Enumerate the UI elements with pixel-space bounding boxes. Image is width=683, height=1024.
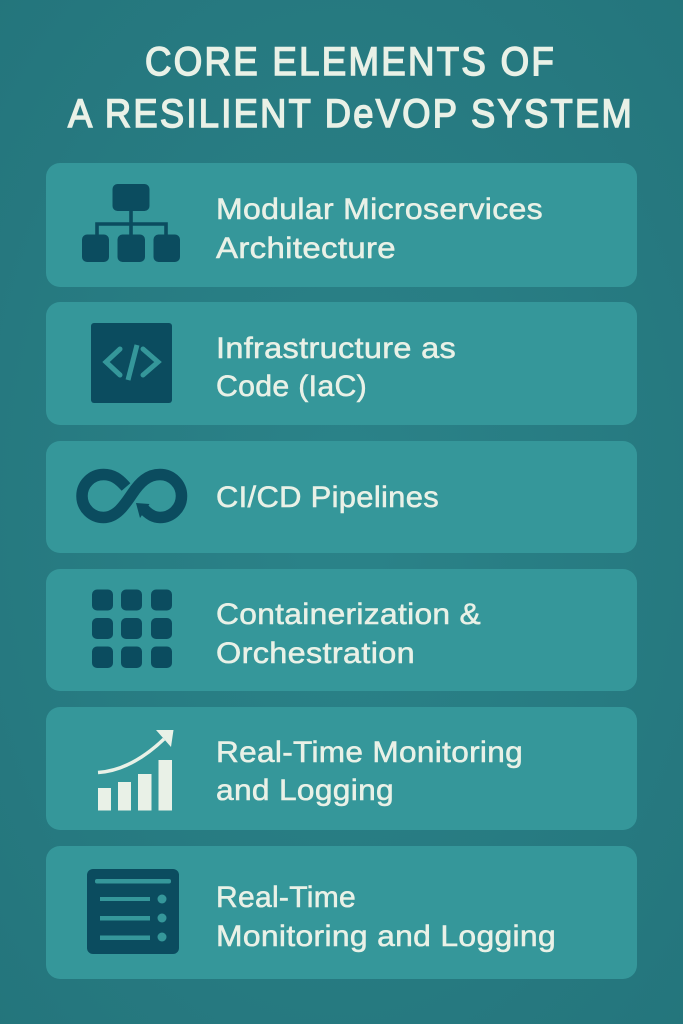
label: real-time monitoring and logging, second: Monitoring and Logging xyxy=(216,920,556,953)
panel: modular microservices architecture xyxy=(46,163,637,287)
label: real-time monitoring and logging, second: Real-Time xyxy=(216,881,356,914)
label: containerization and orchestration xyxy=(216,598,481,670)
label: modular microservices architecture: Modular Microservices xyxy=(216,193,543,226)
icon: rising bar chart with arrow xyxy=(98,730,174,810)
icon: log list xyxy=(87,869,179,954)
icon: infinity loop with arrow xyxy=(82,474,182,518)
label: infrastructure as code: Infrastructure as xyxy=(216,332,456,365)
panel: CI/CD pipelines xyxy=(46,441,637,553)
label: real-time monitoring and logging: and Logging xyxy=(216,774,394,807)
title xyxy=(68,40,634,136)
label: infrastructure as code xyxy=(216,332,456,403)
label: CI/CD pipelines: CI/CD Pipelines xyxy=(216,481,439,514)
title: A RESILIENT DeVOP SYSTEM xyxy=(68,92,634,136)
panel: infrastructure as code xyxy=(46,302,637,425)
label: modular microservices architecture xyxy=(216,193,543,265)
icon: code brackets xyxy=(91,323,172,403)
icon: hierarchy tree xyxy=(82,184,180,262)
label: infrastructure as code: Code (IaC) xyxy=(216,370,367,403)
label: real-time monitoring and logging xyxy=(216,736,523,807)
title: CORE ELEMENTS OF xyxy=(145,40,556,84)
label: real-time monitoring and logging: Real-Time Monitoring xyxy=(216,736,523,769)
label: real-time monitoring and logging, second xyxy=(216,881,556,953)
label: modular microservices architecture: Architecture xyxy=(216,232,396,265)
panel: containerization and orchestration xyxy=(46,569,637,691)
icon: container grid xyxy=(92,590,172,668)
label: containerization and orchestration: Orchestration xyxy=(216,637,415,670)
panel: real-time monitoring and logging, log list xyxy=(46,846,637,979)
label: containerization and orchestration: Containerization & xyxy=(216,598,481,631)
panel: real-time monitoring and logging xyxy=(46,707,637,830)
